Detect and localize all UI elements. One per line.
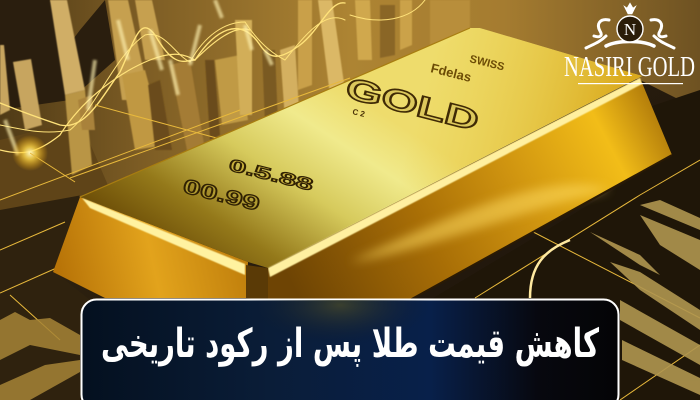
bar stamp: lower engraving: Fdelas	[429, 60, 473, 85]
bar stamp: fineness bottom: 00.99	[181, 176, 262, 216]
front edge highlight	[82, 198, 245, 275]
bar stamp: upper engraving: SWISS	[468, 53, 506, 73]
long edge highlight	[268, 78, 642, 277]
bar side face	[268, 78, 672, 300]
banner glow	[255, 300, 426, 330]
bar front face	[53, 197, 248, 298]
logo: Nasiri Gold	[564, 3, 695, 84]
gold bar	[53, 28, 672, 300]
corner pillar shadow	[246, 265, 268, 300]
banner title: کاهش قیمت طلا پس از رکود تاریخی	[101, 321, 599, 367]
top rim line	[80, 28, 470, 197]
banner panel	[82, 300, 618, 400]
logo medallion	[617, 16, 643, 42]
logo crest	[586, 3, 674, 48]
top face right tint	[268, 28, 642, 268]
glowing price lines	[0, 0, 425, 153]
logo underline	[578, 83, 683, 84]
side bottom shadow	[410, 155, 672, 300]
gold curve on table	[530, 240, 570, 298]
title banner	[80, 298, 620, 400]
floor chart left	[0, 312, 80, 400]
bar chart columns behind the gold bar	[0, 0, 470, 175]
bar stamp: fineness top: 0.5.88	[227, 155, 315, 195]
bar stamp: small marks: C 2	[352, 107, 366, 119]
spark of light	[12, 135, 48, 171]
bar top face	[80, 28, 642, 268]
floor chart right	[590, 200, 700, 395]
logo monogram: N	[624, 20, 636, 39]
side face sheen	[350, 184, 610, 262]
bar stamp: GOLD: GOLD	[342, 72, 482, 138]
